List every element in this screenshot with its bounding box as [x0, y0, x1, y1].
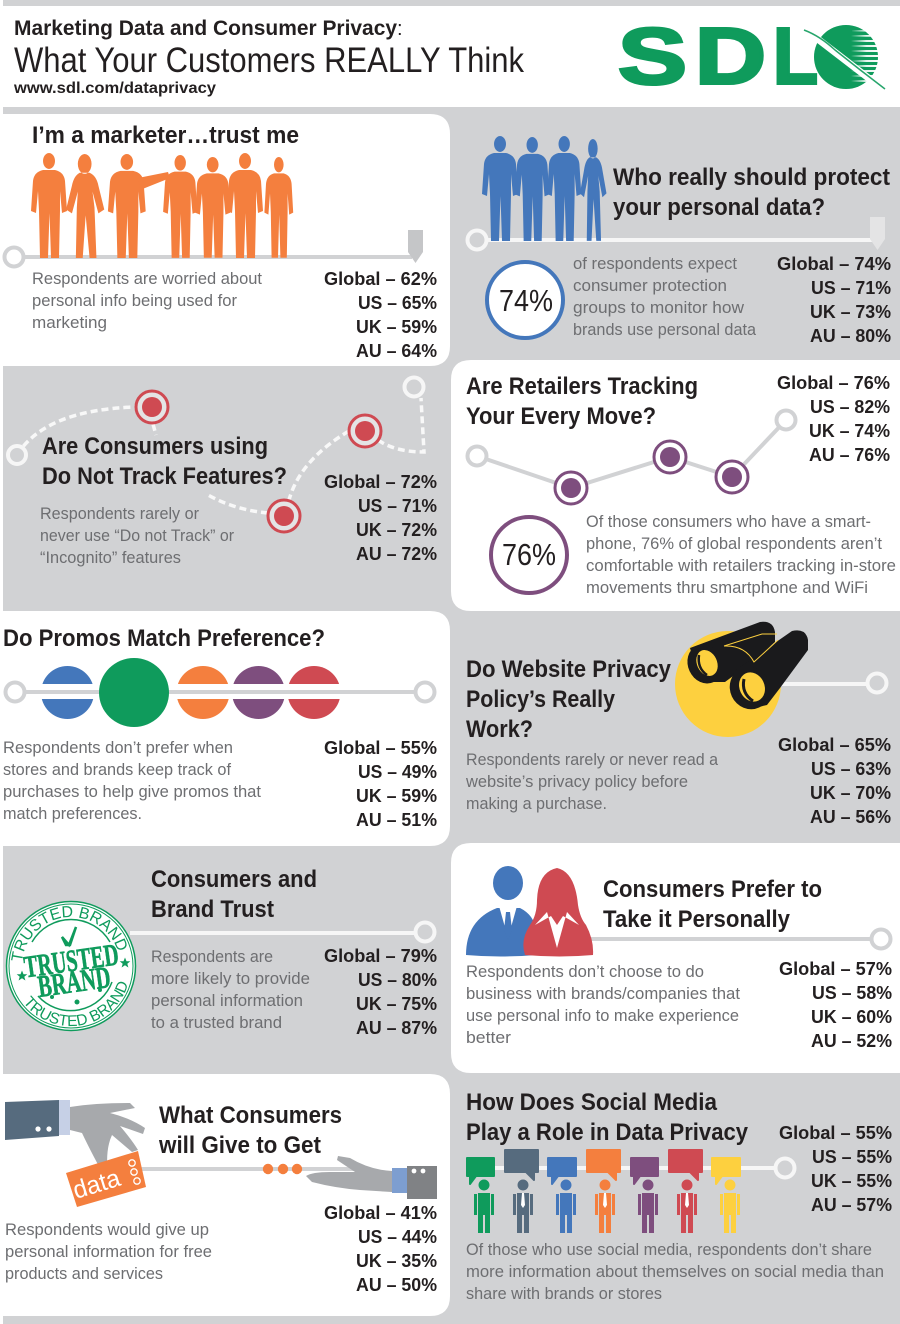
- heading: [613, 164, 890, 221]
- stats: Global – 65%: [778, 735, 891, 755]
- stats: UK – 35%: [356, 1251, 437, 1271]
- description: [466, 1241, 884, 1303]
- heading: What Consumers: [159, 1102, 342, 1129]
- stats: US – 49%: [358, 762, 437, 782]
- heading: Do Website Privacy: [466, 656, 672, 683]
- description: [573, 255, 757, 339]
- stats: [778, 735, 891, 827]
- description: brands use personal data: [573, 321, 757, 339]
- connector: [775, 674, 886, 692]
- stats: US – 58%: [812, 983, 892, 1003]
- stats: AU – 64%: [356, 341, 437, 361]
- panel: do not track: [8, 378, 437, 567]
- description: more likely to provide: [151, 970, 310, 988]
- description: [3, 739, 261, 823]
- heading: [466, 373, 698, 430]
- description: better: [466, 1029, 512, 1047]
- stats: Global – 57%: [779, 959, 892, 979]
- stats: UK – 59%: [356, 317, 437, 337]
- logo: SDL: S: [618, 12, 687, 100]
- heading: I’m a marketer…trust me: [32, 122, 299, 149]
- description: movements thru smartphone and WiFi: [586, 579, 868, 597]
- stats: AU – 80%: [810, 326, 891, 346]
- stats: AU – 76%: [809, 445, 890, 465]
- connector: [490, 1158, 794, 1178]
- url: www.sdl.com/dataprivacy: [13, 80, 216, 97]
- circles row: [6, 658, 434, 727]
- stats: Global – 74%: [777, 254, 891, 274]
- icon: hand giving data card: data: [70, 1164, 124, 1205]
- description: products and services: [5, 1265, 163, 1283]
- icon: hand giving data card: [5, 1100, 146, 1207]
- panel: social media: [466, 1089, 892, 1303]
- connector: [130, 922, 434, 942]
- stats: AU – 52%: [811, 1031, 892, 1051]
- icon: people with speech bubbles: [467, 1150, 740, 1233]
- stats: UK – 70%: [810, 783, 891, 803]
- stats: US – 55%: [812, 1147, 892, 1167]
- icon: trusted brand stamp: [6, 900, 136, 1032]
- description: marketing: [32, 314, 107, 332]
- callout: 76%: [491, 517, 567, 593]
- heading: Take it Personally: [603, 906, 791, 933]
- description: personal information: [151, 992, 303, 1010]
- description: business with brands/companies that: [466, 985, 740, 1003]
- panel: retailers tracking: [451, 360, 900, 611]
- logo: SDL: [618, 12, 885, 100]
- stats: [324, 1203, 437, 1295]
- description: making a purchase.: [466, 795, 607, 813]
- stats: UK – 72%: [356, 520, 437, 540]
- icon: trusted brand stamp: TRUSTED BRAND: [11, 906, 127, 960]
- title line 1: Marketing Data and Consumer Privacy: [14, 17, 397, 40]
- stats: AU – 87%: [356, 1018, 437, 1038]
- stats: Global – 76%: [777, 373, 890, 393]
- stats: [324, 738, 437, 830]
- description: [40, 505, 234, 567]
- panel: give to get: [3, 1074, 450, 1316]
- connector: [590, 930, 890, 948]
- heading: Play a Role in Data Privacy: [466, 1119, 749, 1146]
- description: comfortable with retailers tracking in-store: [586, 557, 896, 575]
- stats: [777, 373, 890, 465]
- description: [32, 270, 262, 332]
- icon: receiving hand: [306, 1156, 437, 1199]
- stats: US – 44%: [358, 1227, 437, 1247]
- stats: [324, 472, 437, 564]
- icon: blue silhouettes: [482, 136, 606, 241]
- heading: [466, 1089, 749, 1146]
- description: share with brands or stores: [466, 1285, 662, 1303]
- stats: US – 71%: [811, 278, 891, 298]
- stats: AU – 56%: [810, 807, 891, 827]
- description: Of those consumers who have a smart-: [586, 513, 871, 531]
- stats: US – 82%: [810, 397, 890, 417]
- description: consumer protection: [573, 277, 727, 295]
- heading: Are Retailers Tracking: [466, 373, 698, 400]
- stats: AU – 72%: [356, 544, 437, 564]
- start and end markers: [8, 378, 424, 464]
- logo: SDL: L: [773, 12, 818, 100]
- stats: Global – 72%: [324, 472, 437, 492]
- stats: UK – 55%: [811, 1171, 892, 1191]
- description: personal information for free: [5, 1243, 212, 1261]
- description: [5, 1221, 212, 1283]
- stats: Global – 55%: [779, 1123, 892, 1143]
- header: title block: [13, 17, 524, 97]
- description: Of those who use social media, respondents don’t share: [466, 1241, 872, 1259]
- icon: orange silhouettes: [31, 153, 293, 258]
- description: Respondents rarely or never read a: [466, 751, 719, 769]
- heading: Your Every Move?: [466, 403, 656, 430]
- stats: [324, 946, 437, 1038]
- icon: man and woman busts: [466, 866, 593, 956]
- callout: 76%: 76%: [502, 537, 556, 572]
- heading: Work?: [466, 716, 533, 743]
- heading: Do Not Track Features?: [42, 463, 287, 490]
- stats: AU – 57%: [811, 1195, 892, 1215]
- description: personal info being used for: [32, 292, 238, 310]
- panel: brand trust: [6, 866, 437, 1038]
- stats: Global – 55%: [324, 738, 437, 758]
- description: “Incognito” features: [40, 549, 181, 567]
- description: groups to monitor how: [573, 299, 744, 317]
- description: of respondents expect: [573, 255, 737, 273]
- heading: Who really should protect: [613, 164, 890, 191]
- description: [465, 751, 719, 813]
- stats: US – 71%: [358, 496, 437, 516]
- stats: US – 63%: [811, 759, 891, 779]
- heading: [603, 876, 822, 933]
- description: stores and brands keep track of: [3, 761, 231, 779]
- stats: [324, 269, 437, 361]
- description: Respondents don’t choose to do: [466, 963, 704, 981]
- heading: [158, 1102, 342, 1159]
- stats: UK – 74%: [809, 421, 890, 441]
- title colon: :: [397, 18, 403, 40]
- stats: UK – 60%: [811, 1007, 892, 1027]
- description: phone, 76% of global respondents aren’t: [586, 535, 882, 553]
- description: match preferences.: [3, 805, 142, 823]
- stats: UK – 59%: [356, 786, 437, 806]
- timeline: [468, 217, 885, 250]
- panel: who should protect: [468, 136, 891, 346]
- heading: Consumers Prefer to: [603, 876, 822, 903]
- description: more information about themselves on social media than: [466, 1263, 884, 1281]
- panel: website privacy: [465, 622, 891, 827]
- stats: [779, 959, 892, 1051]
- logo: SDL: D: [695, 12, 766, 100]
- description: purchases to help give promos that: [3, 783, 261, 801]
- description: Respondents are worried about: [32, 270, 262, 288]
- heading: Brand Trust: [151, 896, 274, 923]
- callout: 74%: [487, 262, 563, 338]
- panel: do promos match: [3, 611, 450, 846]
- stats: AU – 50%: [356, 1275, 437, 1295]
- description: [466, 963, 740, 1047]
- description: Respondents would give up: [5, 1221, 209, 1239]
- line chart: [468, 410, 796, 504]
- stats: Global – 79%: [324, 946, 437, 966]
- description: [586, 513, 896, 597]
- callout: 74%: 74%: [499, 283, 553, 318]
- icon: trusted brand stamp: TRUSTED BRAND: [26, 982, 127, 1026]
- heading: [466, 656, 672, 743]
- heading: Policy’s Really: [466, 686, 616, 713]
- description: [151, 948, 310, 1032]
- connector with dots: [135, 1164, 365, 1174]
- heading: your personal data?: [613, 194, 825, 221]
- panel: I'm a marketer: [3, 114, 450, 366]
- map pins: [136, 391, 381, 532]
- heading: [42, 433, 287, 490]
- icon: trusted brand stamp: TRUSTED: [22, 937, 121, 984]
- description: never use “Do not Track” or: [40, 527, 234, 545]
- heading: Consumers and: [151, 866, 317, 893]
- heading: Are Consumers using: [42, 433, 268, 460]
- description: Respondents are: [151, 948, 273, 966]
- heading: [151, 866, 317, 923]
- stats: US – 80%: [358, 970, 437, 990]
- icon: binoculars: [675, 622, 808, 737]
- heading: will Give to Get: [158, 1132, 321, 1159]
- stats: US – 65%: [358, 293, 437, 313]
- description: Respondents rarely or: [40, 505, 199, 523]
- stats: AU – 51%: [356, 810, 437, 830]
- heading: How Does Social Media: [466, 1089, 718, 1116]
- stats: Global – 62%: [324, 269, 437, 289]
- description: use personal info to make experience: [466, 1007, 739, 1025]
- title line 2: What Your Customers REALLY Think: [14, 41, 524, 80]
- stats: UK – 75%: [356, 994, 437, 1014]
- stats: UK – 73%: [810, 302, 891, 322]
- timeline: [4, 230, 423, 266]
- description: website’s privacy policy before: [465, 773, 688, 791]
- stats: Global – 41%: [324, 1203, 437, 1223]
- panel: take it personally: [451, 843, 900, 1073]
- stats: [777, 254, 891, 346]
- dashed route: [17, 398, 424, 513]
- description: Respondents don’t prefer when: [3, 739, 233, 757]
- stats: [779, 1123, 892, 1215]
- description: to a trusted brand: [151, 1014, 282, 1032]
- icon: trusted brand stamp: BRAND: [35, 959, 113, 1004]
- heading: Do Promos Match Preference?: [3, 625, 325, 652]
